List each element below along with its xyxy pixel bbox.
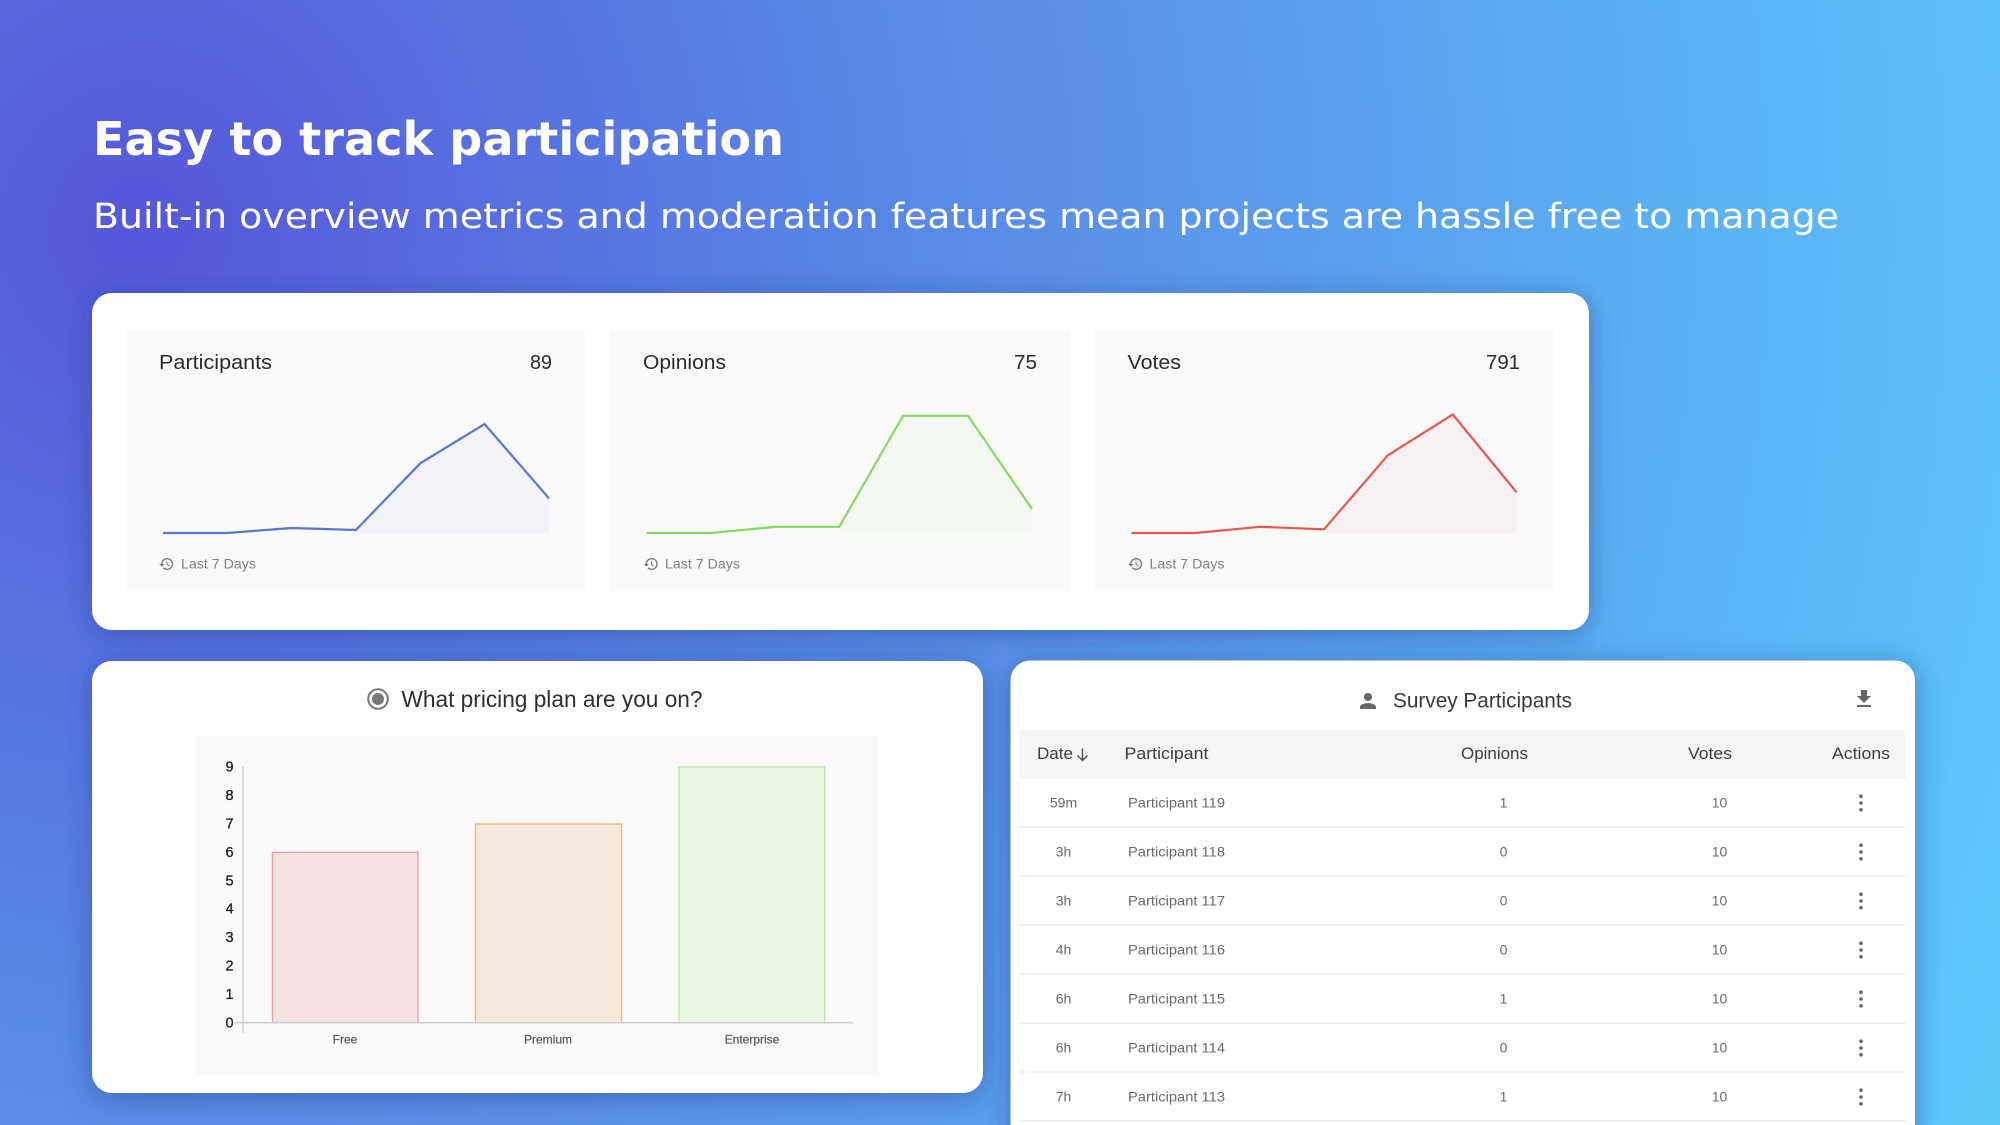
metric card: votes: Last 7 Days [1150,556,1224,572]
metric card: opinions: 75 [1014,351,1037,374]
panel: overview metrics [92,293,1589,630]
bar chart: Free [333,1032,358,1046]
title: Easy to track participation [93,112,784,166]
table row 116: 10 [1712,942,1727,958]
table row 119: 59m [1050,794,1077,810]
table row 115: 1 [1500,990,1508,1006]
table row 115 [1020,990,1906,1023]
bar chart: 6 [225,845,234,861]
metric card: votes [1094,330,1554,591]
table row 113: 1 [1500,1088,1508,1104]
table header row: Actions [1832,744,1890,763]
table row 117: 3h [1056,892,1071,908]
table row 113: Participant 113 [1128,1088,1225,1104]
table row 114: 10 [1712,1040,1727,1056]
question heading: What pricing plan are you on? [402,686,702,712]
table row 114: 6h [1056,1040,1071,1056]
metric card: votes: 791 [1486,351,1520,374]
table header row: Date [1037,744,1073,763]
table row 117: 10 [1712,892,1727,908]
table row 116 [1020,941,1906,974]
bar chart: 5 [225,873,234,889]
table row 114: 0 [1500,1040,1508,1056]
metric card: participants: Last 7 Days [181,556,256,572]
bar chart: Enterprise [725,1032,780,1046]
table row 119: Participant 119 [1128,794,1225,810]
metric card: participants [126,330,585,591]
table row 115: 10 [1712,990,1727,1006]
bar chart: 0 [225,1015,234,1031]
table row 113 [1020,1088,1906,1121]
table row 114: Participant 114 [1128,1040,1225,1056]
table header row: Votes [1688,744,1732,763]
panel: pricing plan question [92,661,983,1093]
panel: survey participants table [1010,660,1915,1125]
table row 114 [1020,1039,1906,1072]
table row 117: Participant 117 [1128,892,1225,908]
table header row: Participant [1124,744,1209,763]
metric card: participants: Participants [159,351,272,374]
icon: radio button [368,689,388,709]
icon: person [1360,693,1376,709]
table row 118: 0 [1500,844,1508,860]
bar chart: 1 [225,987,234,1003]
table row 118 [1020,843,1906,876]
bar chart: 2 [225,958,234,974]
bar chart: 9 [225,760,234,776]
table heading: Survey Participants [1393,690,1572,712]
table row 113: 10 [1712,1088,1727,1104]
table row 119: 10 [1712,794,1727,810]
bar chart: Premium [524,1032,572,1046]
bar chart: 8 [225,788,234,804]
subtitle: Built-in overview metrics and moderation features mean projects are hassle free to manage [93,197,1839,237]
table row 116: Participant 116 [1128,942,1225,958]
table row 118: 3h [1056,844,1071,860]
table header row: Opinions [1461,744,1528,763]
table row 119 [1020,794,1906,827]
table row 119: 1 [1500,794,1508,810]
table row 117: 0 [1500,892,1508,908]
bar chart: 4 [225,902,234,918]
table row 118: 10 [1712,844,1727,860]
bar chart [196,736,879,1076]
table header row [1020,730,1906,779]
icon: download [1857,690,1871,707]
table row 118: Participant 118 [1128,844,1225,860]
table row 117 [1020,892,1906,925]
table row 116: 0 [1500,942,1508,958]
table row 115: Participant 115 [1128,990,1225,1006]
metric card: opinions: Last 7 Days [665,556,740,572]
metric card: votes: Votes [1128,351,1181,374]
metric card: opinions [610,330,1070,591]
metric card: participants: 89 [530,351,552,374]
table row 116: 4h [1056,942,1071,958]
table row 115: 6h [1056,990,1071,1006]
bar chart: 7 [225,816,234,832]
metric card: opinions: Opinions [643,351,726,374]
table row 113: 7h [1056,1088,1071,1104]
bar chart: 3 [225,930,234,946]
